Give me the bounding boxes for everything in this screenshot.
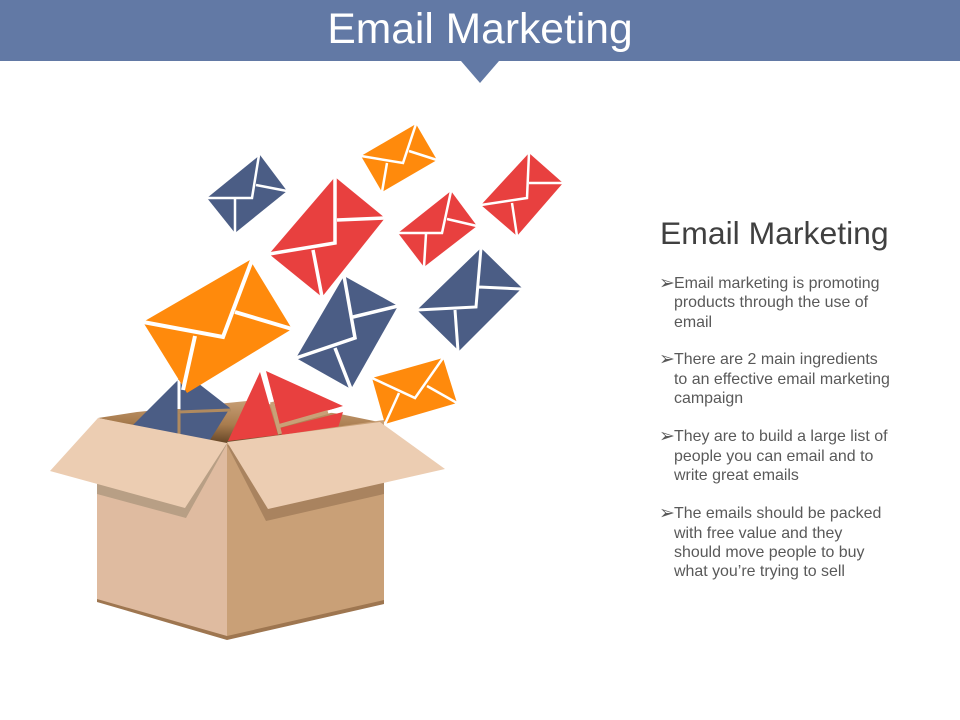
bullet 1: products through the use of (674, 294, 868, 311)
bullet 2: There are 2 main ingredients (674, 351, 878, 368)
bullet 2: to an effective email marketing (674, 370, 890, 388)
left flap shadow (97, 444, 227, 518)
box interior (98, 401, 384, 446)
bullet 4: what you’re trying to sell (674, 563, 845, 580)
bullet 2 (659, 348, 890, 407)
text heading: Email Marketing (660, 215, 889, 251)
bullet 4: The emails should be packed (674, 505, 881, 522)
envelope: orange top (361, 124, 437, 192)
bullet 1 (659, 272, 880, 330)
bullet 1: Email marketing is promoting (674, 275, 880, 292)
bullet 3: write great emails (674, 467, 799, 484)
bullet 2: campaign (674, 390, 743, 407)
header banner (0, 0, 960, 83)
envelope: red inside box (228, 371, 344, 441)
envelope: red middle (398, 191, 477, 267)
box right wall (227, 420, 384, 637)
envelope: blue small (207, 155, 287, 233)
bullet 1: ➢ (659, 272, 675, 294)
title: Email Marketing (327, 5, 633, 53)
bullet 3: ➢ (659, 425, 675, 447)
envelope: red large (269, 177, 385, 297)
bullet 4 (659, 502, 881, 580)
envelope: blue inside box (133, 373, 231, 440)
envelope: blue centre (296, 276, 398, 389)
bullet 3: They are to build a large list of (674, 428, 888, 445)
bullet 4: should move people to buy (674, 544, 864, 560)
left flap (50, 418, 227, 508)
bullet 1: email (674, 314, 712, 330)
bullet 2: ➢ (659, 348, 675, 370)
bullet 4: with free value and they (674, 524, 842, 542)
bullet 3 (659, 425, 888, 484)
envelope: blue right (417, 248, 522, 351)
right flap (227, 422, 445, 509)
envelope: red right (481, 153, 563, 236)
bullet 4: ➢ (659, 502, 675, 524)
bullet 3: people you can email and to (674, 448, 873, 464)
box left wall (97, 443, 227, 638)
right flap shadow (227, 445, 384, 521)
envelope: orange large (143, 260, 292, 393)
box bottom edge (97, 599, 384, 640)
envelope: orange lower right (372, 358, 457, 424)
